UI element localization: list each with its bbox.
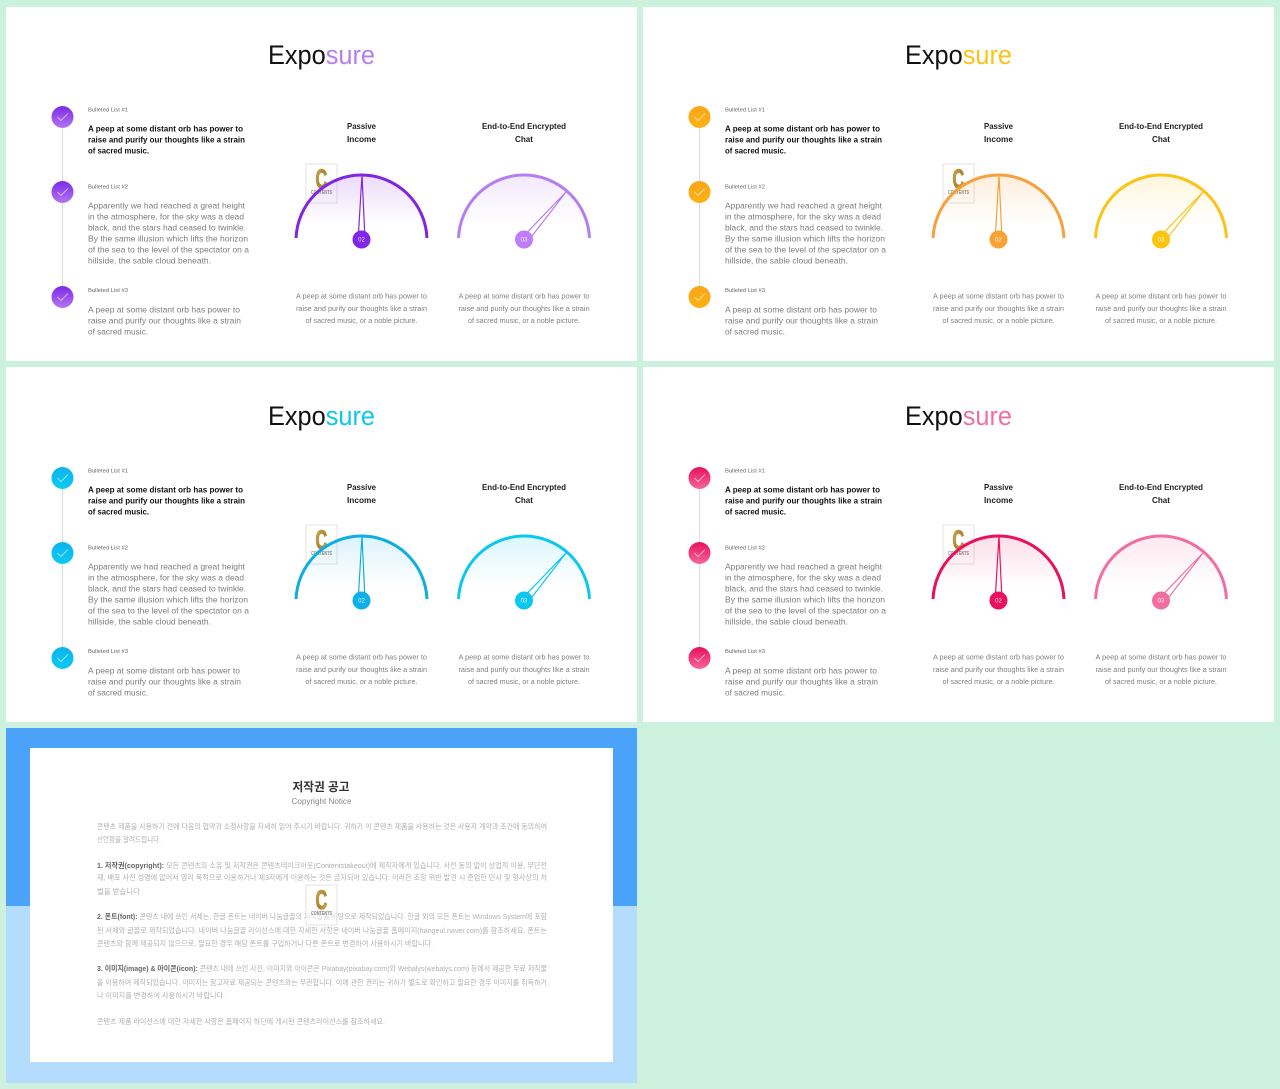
- text block: introduction: 선언함을 알려드립니다.: [97, 834, 161, 844]
- icon: check 1: [52, 106, 74, 128]
- bulleted list 2: Bulleted List #2: [88, 184, 128, 190]
- bulleted list 2: [88, 546, 249, 626]
- text block: image and icon clause: 3. 이미지(image) & 아이콘(icon): 콘텐츠 내에 쓰인 사진, 이미지와 아이콘은 Pixabay(pixabay.com)와 Webalys(webalys.com) 등에서 제공한 무료 저작물: [97, 963, 547, 973]
- icon: contents logo watermark: CONTENTS: [311, 551, 333, 557]
- heading: encrypted chat: Chat: [1152, 134, 1170, 144]
- heading: encrypted chat: [1119, 121, 1203, 144]
- heading: encrypted chat: [1119, 482, 1203, 505]
- caption: encrypted chat: raise and purify our thoughts like a strain: [458, 665, 590, 674]
- icon: check 3: [688, 286, 710, 308]
- gauge: passive income: [296, 175, 427, 248]
- icon: contents logo watermark: [943, 164, 974, 203]
- panel: orange exposure slide: [643, 7, 1274, 361]
- gauge: encrypted chat: 03: [521, 598, 528, 604]
- bulleted list 2: [88, 184, 249, 266]
- bulleted list 1: [88, 468, 245, 516]
- title: Exposure: [268, 401, 375, 431]
- bulleted list 2: Bulleted List #2: [725, 184, 765, 190]
- bulleted list 3: raise and purify our thoughts like a strain: [725, 316, 878, 326]
- heading: encrypted chat: End-to-End Encrypted: [1119, 482, 1203, 492]
- bulleted list 2: Apparently we had reached a great height: [725, 562, 883, 572]
- bulleted list 2: By the same illusion which lifts the horizon: [88, 234, 248, 244]
- icon: check 3: [52, 286, 74, 308]
- caption: passive income: A peep at some distant orb has power to: [296, 292, 427, 300]
- caption: passive income: raise and purify our thoughts like a strain: [296, 665, 427, 674]
- icon: check 2: [52, 181, 74, 203]
- gauge: passive income: 02: [995, 598, 1002, 604]
- icon: check 3: [688, 647, 710, 669]
- caption: passive income: [933, 652, 1064, 686]
- bulleted list 2: Bulleted List #2: [88, 546, 128, 552]
- panel: purple exposure slide: [6, 7, 637, 361]
- gauge: encrypted chat: [459, 175, 589, 248]
- icon: check 2: [688, 542, 710, 564]
- icon: contents logo watermark: C: [316, 525, 327, 555]
- bulleted list 2: hillside, the sable cloud beneath.: [725, 256, 848, 266]
- heading: copyright notice: 저작권 공고: [292, 779, 350, 794]
- bulleted list 2: Apparently we had reached a great height: [88, 200, 246, 210]
- timeline connector: [698, 478, 700, 658]
- bulleted list 1: of sacred music.: [725, 146, 786, 156]
- bulleted list 1: of sacred music.: [725, 506, 786, 516]
- bulleted list 2: in the atmosphere, for the sky was a dead: [725, 572, 881, 582]
- caption: passive income: [296, 292, 427, 325]
- gauge: encrypted chat: [1096, 175, 1226, 248]
- text block: image and icon clause: [97, 963, 547, 1000]
- heading: passive income: Passive: [984, 121, 1013, 131]
- bulleted list 1: raise and purify our thoughts like a strain: [725, 134, 882, 144]
- icon: contents logo watermark: C: [952, 164, 964, 194]
- bulleted list 2: hillside, the sable cloud beneath.: [88, 616, 211, 626]
- bulleted list 3: Bulleted List #3: [88, 649, 128, 655]
- caption: encrypted chat: of sacred music, or a noble picture.: [1105, 316, 1217, 325]
- bulleted list 3: raise and purify our thoughts like a strain: [88, 676, 241, 686]
- caption: encrypted chat: raise and purify our thoughts like a strain: [1096, 665, 1226, 674]
- gauge: passive income: 02: [995, 238, 1002, 244]
- bulleted list 3: [88, 288, 241, 336]
- icon: contents logo watermark: CONTENTS: [948, 190, 970, 196]
- text block: font clause: [97, 911, 547, 948]
- bulleted list 3: of sacred music.: [725, 688, 785, 698]
- icon: check 1: [688, 467, 710, 489]
- heading: passive income: Income: [347, 495, 376, 505]
- bulleted list 2: By the same illusion which lifts the horizon: [725, 594, 885, 604]
- text block: font clause: 2. 폰트(font): 콘텐츠 내에 쓰인 서체는, 한글 폰트는 네이버 나눔글꼴의 저작물을 바탕으로 제작되었습니다. 한글 외의 모든 폰트는 Windows System에 포함: [97, 911, 547, 921]
- bulleted list 2: in the atmosphere, for the sky was a dead: [725, 212, 881, 222]
- text block: font clause: 된 서체와 글꼴로 제작되었습니다. 네이버 나눔글꼴 라이선스에 대한 자세한 사항은 네이버 나눔글꼴 홈페이지(hangeul.naver.com)를 참조하세요. 폰트는: [97, 925, 547, 935]
- caption: passive income: of sacred music, or a noble picture.: [306, 677, 418, 686]
- bulleted list 2: of the sea to the level of the spectator on a: [88, 244, 249, 254]
- bulleted list 1: Bulleted List #1: [725, 468, 765, 474]
- bulleted list 1: raise and purify our thoughts like a strain: [88, 134, 245, 144]
- bulleted list 2: of the sea to the level of the spectator on a: [725, 244, 886, 254]
- title: Exposure: [905, 40, 1012, 70]
- bulleted list 3: Bulleted List #3: [725, 649, 765, 655]
- text block: introduction: [97, 821, 547, 844]
- bulleted list 2: hillside, the sable cloud beneath.: [725, 616, 848, 626]
- bulleted list 2: black, and the stars had ceased to twinkle.: [88, 584, 246, 594]
- gauge: passive income: 02: [358, 238, 365, 244]
- caption: encrypted chat: [1096, 292, 1226, 325]
- timeline connector: [698, 117, 700, 297]
- heading: passive income: Income: [984, 495, 1013, 505]
- bulleted list 3: of sacred music.: [725, 326, 785, 336]
- bulleted list 1: A peep at some distant orb has power to: [88, 124, 243, 134]
- caption: passive income: of sacred music, or a noble picture.: [942, 316, 1054, 325]
- caption: encrypted chat: of sacred music, or a noble picture.: [1105, 677, 1217, 686]
- caption: encrypted chat: A peep at some distant orb has power to: [458, 292, 590, 300]
- text block: license note: 콘텐츠 제품 라이선스에 대한 자세한 사항은 홈페이지 하단에 게시된 콘텐츠라이선스를 참조하세요.: [97, 1016, 385, 1026]
- bulleted list 3: of sacred music.: [88, 688, 148, 698]
- icon: contents logo watermark: C: [952, 525, 964, 555]
- icon: contents logo watermark: [306, 885, 337, 925]
- caption: encrypted chat: [458, 652, 590, 686]
- heading: passive income: Passive: [347, 482, 376, 492]
- icon: contents logo watermark: [306, 525, 337, 564]
- bulleted list 1: A peep at some distant orb has power to: [725, 484, 880, 494]
- heading: passive income: Passive: [347, 121, 376, 131]
- bulleted list 3: A peep at some distant orb has power to: [88, 304, 240, 314]
- bulleted list 2: black, and the stars had ceased to twinkle.: [725, 222, 883, 232]
- caption: passive income: [933, 292, 1064, 325]
- bulleted list 1: raise and purify our thoughts like a strain: [725, 496, 882, 506]
- bulleted list 2: Bulleted List #2: [725, 546, 765, 552]
- heading: encrypted chat: [482, 121, 566, 144]
- caption: passive income: [296, 652, 427, 686]
- icon: check 1: [52, 467, 74, 489]
- bulleted list 3: [725, 649, 878, 698]
- caption: passive income: of sacred music, or a noble picture.: [306, 316, 418, 325]
- bulleted list 1: [88, 108, 245, 156]
- bulleted list 1: Bulleted List #1: [88, 468, 128, 474]
- text block: introduction: 콘텐츠 제품을 사용하기 전에 다음의 협약과 소정사항을 자세히 읽어 주시기 바랍니다. 귀하가 이 콘텐츠 제품을 사용하는 것은 사용자 계약과 조건에 동의하여: [97, 821, 547, 831]
- bulleted list 2: Apparently we had reached a great height: [88, 562, 246, 572]
- text block: font clause: 콘텐츠와 함께 제공되지 않으므로, 필요한 경우 해당 폰트를 구입하거나 다른 폰트로 변경하여 사용하시기 바랍니다.: [97, 938, 433, 948]
- title: Exposure: [905, 401, 1012, 431]
- bulleted list 2: of the sea to the level of the spectator on a: [88, 606, 249, 616]
- bulleted list 1: of sacred music.: [88, 146, 149, 156]
- bulleted list 2: of the sea to the level of the spectator on a: [725, 606, 886, 616]
- text block: image and icon clause: 을 이용하여 제작되었습니다. 이미지는 참고자료 제공되는 콘텐츠와는 무관합니다. 이에 관한 권리는 귀하가 별도로 확인하고 필요한 경우 이미지를 취득하거: [97, 977, 547, 987]
- heading: passive income: [347, 121, 376, 144]
- bulleted list 3: raise and purify our thoughts like a strain: [725, 676, 878, 686]
- gauge: encrypted chat: 03: [521, 238, 528, 244]
- caption: encrypted chat: raise and purify our thoughts like a strain: [458, 304, 590, 313]
- caption: encrypted chat: A peep at some distant orb has power to: [458, 652, 590, 662]
- gauge: passive income: [933, 175, 1064, 248]
- icon: check 2: [52, 542, 74, 564]
- heading: encrypted chat: End-to-End Encrypted: [482, 121, 566, 131]
- bulleted list 3: raise and purify our thoughts like a strain: [88, 316, 241, 326]
- text block: copyright clause: 재, 배포 사전 성명에 없어서 영리 목적으로 이용하거나 제3자에게 이용하는 것은 금지되어 있습니다. 이러한 조항 위반 발견 시 준엄한 민사 및 형사상의 처: [97, 872, 547, 882]
- bulleted list 3: [88, 649, 241, 698]
- bulleted list 2: By the same illusion which lifts the horizon: [88, 594, 248, 604]
- bulleted list 2: Apparently we had reached a great height: [725, 200, 883, 210]
- icon: contents logo watermark: [943, 525, 974, 564]
- icon: contents logo watermark: C: [316, 885, 327, 915]
- bulleted list 3: Bulleted List #3: [725, 288, 765, 294]
- heading: copyright notice: [292, 779, 352, 806]
- bulleted list 2: By the same illusion which lifts the horizon: [725, 234, 885, 244]
- bulleted list 3: Bulleted List #3: [88, 288, 128, 294]
- caption: encrypted chat: of sacred music, or a noble picture.: [468, 677, 580, 686]
- panel: copyright notice slide: [6, 728, 637, 1083]
- heading: encrypted chat: Chat: [1152, 495, 1170, 505]
- caption: passive income: raise and purify our thoughts like a strain: [933, 665, 1064, 674]
- icon: contents logo watermark: CONTENTS: [948, 551, 970, 557]
- caption: encrypted chat: A peep at some distant orb has power to: [1096, 652, 1226, 662]
- heading: passive income: Income: [347, 134, 376, 144]
- icon: contents logo watermark: [306, 164, 337, 203]
- bulleted list 3: of sacred music.: [88, 326, 148, 336]
- timeline connector: [62, 117, 64, 297]
- gauge: encrypted chat: 03: [1158, 238, 1165, 244]
- bulleted list 1: raise and purify our thoughts like a strain: [88, 496, 245, 506]
- icon: check 3: [52, 647, 74, 669]
- heading: encrypted chat: Chat: [515, 134, 533, 144]
- title: Exposure: [268, 40, 375, 70]
- heading: passive income: [984, 482, 1013, 505]
- gauge: passive income: [296, 536, 427, 610]
- caption: encrypted chat: of sacred music, or a noble picture.: [468, 316, 580, 325]
- bulleted list 2: hillside, the sable cloud beneath.: [88, 256, 211, 266]
- bulleted list 2: [725, 546, 886, 626]
- caption: encrypted chat: [1096, 652, 1226, 686]
- icon: contents logo watermark: CONTENTS: [311, 190, 333, 196]
- heading: encrypted chat: End-to-End Encrypted: [482, 482, 566, 492]
- bulleted list 1: Bulleted List #1: [725, 108, 765, 114]
- heading: encrypted chat: Chat: [515, 495, 533, 505]
- bulleted list 1: Bulleted List #1: [88, 108, 128, 114]
- heading: passive income: [347, 482, 376, 505]
- bulleted list 3: A peep at some distant orb has power to: [725, 304, 877, 314]
- gauge: passive income: 02: [358, 598, 365, 604]
- heading: encrypted chat: End-to-End Encrypted: [1119, 121, 1203, 131]
- text block: copyright clause: [97, 860, 547, 896]
- caption: encrypted chat: [458, 292, 590, 325]
- bulleted list 2: in the atmosphere, for the sky was a dead: [88, 212, 244, 222]
- gauge: encrypted chat: [1096, 536, 1226, 610]
- caption: passive income: raise and purify our thoughts like a strain: [296, 304, 427, 313]
- heading: copyright notice: Copyright Notice: [292, 797, 352, 806]
- heading: passive income: [984, 121, 1013, 144]
- caption: passive income: A peep at some distant orb has power to: [933, 652, 1064, 662]
- icon: check 1: [688, 106, 710, 128]
- caption: encrypted chat: raise and purify our thoughts like a strain: [1096, 304, 1226, 313]
- timeline connector: [62, 478, 64, 658]
- panel: blue exposure slide: [6, 367, 637, 722]
- text block: image and icon clause: 나 이미지를 변경하여 사용하시기 바랍니다.: [97, 990, 225, 1000]
- text block: copyright clause: 벌을 받습니다.: [97, 886, 142, 896]
- bulleted list 3: A peep at some distant orb has power to: [725, 666, 877, 676]
- bulleted list 3: A peep at some distant orb has power to: [88, 666, 240, 676]
- panel: pink exposure slide: [643, 367, 1274, 722]
- caption: passive income: A peep at some distant orb has power to: [296, 652, 427, 662]
- bulleted list 1: [725, 468, 882, 516]
- caption: encrypted chat: A peep at some distant orb has power to: [1096, 292, 1226, 300]
- caption: passive income: of sacred music, or a noble picture.: [942, 677, 1054, 686]
- bulleted list 3: [725, 288, 878, 336]
- bulleted list 1: [725, 108, 882, 156]
- gauge: encrypted chat: [459, 536, 589, 610]
- bulleted list 2: [725, 184, 886, 266]
- gauge: encrypted chat: 03: [1158, 598, 1165, 604]
- gauge: passive income: [933, 536, 1064, 610]
- bulleted list 1: A peep at some distant orb has power to: [725, 124, 880, 134]
- caption: passive income: A peep at some distant orb has power to: [933, 292, 1064, 300]
- bulleted list 2: black, and the stars had ceased to twinkle.: [725, 584, 883, 594]
- icon: check 2: [688, 181, 710, 203]
- bulleted list 1: of sacred music.: [88, 506, 149, 516]
- bulleted list 1: A peep at some distant orb has power to: [88, 484, 243, 494]
- heading: encrypted chat: [482, 482, 566, 505]
- text block: copyright clause: 1. 저작권(copyright): 모든 콘텐츠의 소유 및 저작권은 콘텐츠테이크아웃(Contentstakeout)에 제작자에게 있습니다. 사전 동의 없이 상업적 이용, 무단전: [97, 860, 547, 870]
- heading: passive income: Passive: [984, 482, 1013, 492]
- caption: passive income: raise and purify our thoughts like a strain: [933, 304, 1064, 313]
- bulleted list 2: in the atmosphere, for the sky was a dead: [88, 572, 244, 582]
- icon: contents logo watermark: C: [316, 164, 327, 194]
- bulleted list 2: black, and the stars had ceased to twinkle.: [88, 222, 246, 232]
- heading: passive income: Income: [984, 134, 1013, 144]
- icon: contents logo watermark: CONTENTS: [311, 911, 333, 917]
